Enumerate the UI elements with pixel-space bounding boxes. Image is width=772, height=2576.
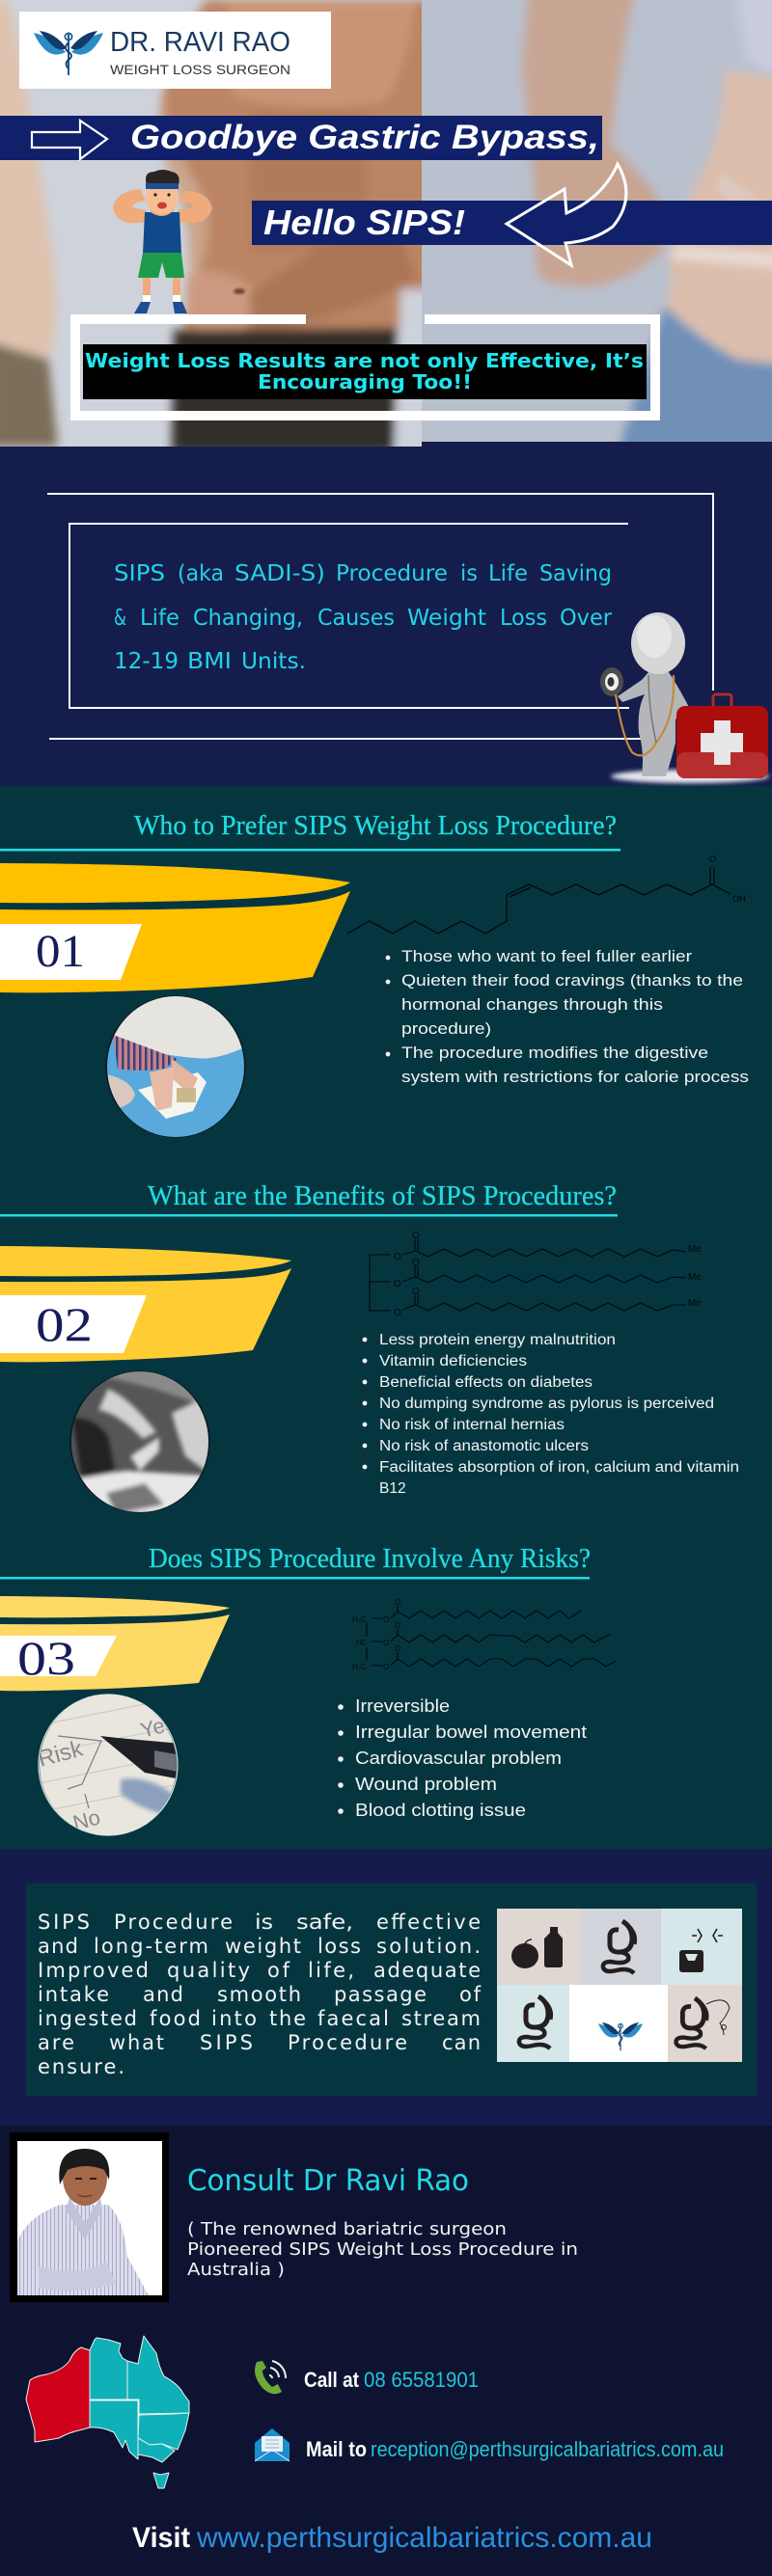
- molecule 02: O: [394, 1252, 401, 1262]
- molecule 03: HC: [356, 1639, 368, 1647]
- summary text: SIPS: [200, 2031, 253, 2054]
- icon: curved arrow: [507, 164, 626, 265]
- band 02: 02: [36, 1297, 93, 1351]
- bullet list 01: procedure): [401, 1020, 491, 1038]
- inner frame: [69, 524, 629, 708]
- intro text: Life: [140, 606, 179, 631]
- molecule 03: O: [395, 1598, 400, 1607]
- intro text: BMI: [187, 649, 232, 674]
- bullet list 02: Less protein energy malnutrition: [379, 1332, 616, 1348]
- panel: SIPS intro: [0, 442, 772, 786]
- bullet list 03: Blood clotting issue: [355, 1801, 526, 1820]
- panel: teal sections: [0, 786, 772, 1849]
- bullet list 02: No risk of internal hernias: [379, 1417, 565, 1433]
- bullet list 03: Cardiovascular problem: [355, 1749, 562, 1768]
- bullet list 02: No risk of anastomotic ulcers: [379, 1438, 589, 1454]
- bullet list 03: Irregular bowel movement: [355, 1722, 587, 1742]
- website link: www.perthsurgicalbariatrics.com.au: [196, 2522, 652, 2554]
- intro text: Procedure: [336, 561, 448, 586]
- bullet list 01: system with restrictions for calorie process: [401, 1069, 749, 1086]
- bullet list 03: [338, 1696, 587, 1820]
- heading 03: Does SIPS Procedure Involve Any Risks?: [149, 1543, 591, 1574]
- bullet list 01: Those who want to feel fuller earlier: [401, 948, 693, 965]
- molecule 01: [347, 854, 745, 934]
- panel: safe procedure summary: [0, 1849, 772, 2126]
- summary text: the: [269, 2007, 306, 2030]
- summary text: Improved: [38, 1959, 149, 1982]
- molecule 01: O: [709, 854, 716, 864]
- summary text: faecal: [317, 2007, 389, 2030]
- photo: Dr Ravi Rao portrait: [10, 2132, 169, 2302]
- summary text: of: [267, 1959, 290, 1982]
- summary text: ensure.: [38, 2055, 124, 2078]
- summary text: safe,: [296, 1911, 353, 1934]
- consult description: Pioneered SIPS Weight Loss Procedure in: [187, 2239, 578, 2260]
- section 03: risks: [0, 1543, 616, 1842]
- summary text: loss: [317, 1935, 361, 1958]
- white frame: [75, 319, 655, 416]
- bullet list 02: No dumping syndrome as pylorus is perceived: [379, 1396, 714, 1412]
- summary text: what: [109, 2031, 164, 2054]
- intro text: (aka: [178, 561, 224, 586]
- intro text: &: [114, 606, 126, 631]
- callout: results: Weight Loss Results are not only Effective, It’s: [85, 349, 644, 372]
- molecule 02: O: [394, 1308, 401, 1318]
- headline line one: Goodbye Gastric Bypass,: [130, 119, 599, 156]
- bullet list 02: Vitamin deficiencies: [379, 1353, 527, 1369]
- molecule 02: Me: [688, 1272, 702, 1283]
- summary text: adequate: [373, 1959, 481, 1982]
- banner: goodbye: [0, 116, 602, 160]
- bullet list 02: Beneficial effects on diabetes: [379, 1374, 593, 1391]
- icon: stomach one: [603, 1921, 636, 1973]
- intro text: Weight: [407, 606, 486, 631]
- consult description: [187, 2219, 578, 2280]
- intro text: SADI-S): [234, 561, 325, 586]
- intro text: Changing,: [193, 606, 303, 631]
- icon: right arrow: [32, 121, 107, 159]
- intro text: Life: [488, 561, 528, 586]
- molecule 03: O: [383, 1615, 389, 1624]
- molecule 02: O: [412, 1231, 420, 1241]
- photo: overweight torso: [422, 0, 772, 453]
- icon: phone: [255, 2361, 286, 2394]
- intro text: Loss: [500, 606, 547, 631]
- molecule 03: H₂C: [352, 1663, 367, 1671]
- summary text: effective: [376, 1911, 481, 1934]
- consult heading: Consult Dr Ravi Rao: [187, 2164, 469, 2198]
- photo: slim torso: [0, 0, 434, 453]
- icon: scale and arrows: [679, 1929, 723, 1972]
- intro text: Units.: [241, 649, 306, 674]
- summary text: quality: [167, 1959, 250, 1982]
- summary text: passage: [334, 1983, 427, 2006]
- intro text: is: [460, 561, 478, 586]
- logo tagline: WEIGHT LOSS SURGEON: [110, 62, 290, 77]
- molecule 02: O: [412, 1287, 420, 1297]
- summary text: solution.: [376, 1935, 481, 1958]
- molecule 03: H₂C: [352, 1615, 367, 1624]
- panel: consult footer: [10, 2132, 723, 2553]
- icon: mail: [255, 2428, 290, 2461]
- photo: risk note and pen: Yes: [138, 1710, 178, 1743]
- summary text: and: [38, 1935, 78, 1958]
- photo: risk note and pen: [38, 1694, 179, 1836]
- molecule 03: O: [395, 1621, 400, 1630]
- intro text: Over: [560, 606, 613, 631]
- molecule 02: Me: [688, 1244, 702, 1255]
- summary text: Procedure: [114, 1911, 233, 1934]
- band 03: 03: [17, 1631, 75, 1685]
- heading underline: [0, 849, 620, 851]
- summary text: Procedure: [288, 2031, 407, 2054]
- summary text: and: [143, 1983, 183, 2006]
- section 02: benefits: [0, 1180, 739, 1514]
- number label 01: [0, 924, 142, 980]
- intro text: Causes: [317, 606, 395, 631]
- icon: caduceus logo: [34, 31, 103, 75]
- bullet list 01: [386, 948, 749, 1086]
- band 02: [0, 1246, 291, 1362]
- heading 01: Who to Prefer SIPS Weight Loss Procedure?: [134, 810, 617, 841]
- number label 02: [0, 1295, 147, 1353]
- molecule 03: [352, 1598, 616, 1671]
- summary text: life,: [308, 1959, 354, 1982]
- consult description: ( The renowned bariatric surgeon: [187, 2219, 507, 2239]
- molecule 03: O: [383, 1639, 389, 1647]
- bullet list 01: Quieten their food cravings (thanks to the: [401, 972, 743, 990]
- icon grid: [497, 1909, 742, 2062]
- icon: flexing cartoon man: [113, 170, 212, 313]
- molecule 02: O: [412, 1258, 420, 1268]
- photo: risk note and pen: Risk: [36, 1735, 87, 1773]
- bullet list 02: B12: [379, 1480, 406, 1497]
- headline line two: Hello SIPS!: [263, 203, 465, 242]
- molecule 03: O: [395, 1644, 400, 1653]
- callout: results: Encouraging Too!!: [258, 370, 472, 393]
- molecule 02: [370, 1231, 702, 1318]
- molecule 02: O: [394, 1279, 401, 1289]
- icon: stomach two: [519, 1996, 552, 2048]
- photo: feet on scale: [105, 995, 246, 1138]
- bullet list 02: [363, 1332, 739, 1497]
- band 01: 01: [36, 926, 85, 977]
- number label 03: [0, 1636, 117, 1676]
- molecule 02: Me: [688, 1298, 702, 1309]
- summary text: of: [459, 1983, 482, 2006]
- banner: hello: [252, 164, 772, 265]
- icon: caduceus logo small: [598, 2022, 643, 2050]
- logo name: DR. RAVI RAO: [110, 27, 290, 58]
- consult description: Australia ): [187, 2260, 285, 2280]
- map of Australia: [26, 2336, 189, 2488]
- summary text: long-term: [94, 1935, 208, 1958]
- bullet list 03: Irreversible: [355, 1696, 450, 1716]
- intro text: Saving: [539, 561, 612, 586]
- contact: email: Mail to: [306, 2437, 367, 2461]
- summary text: smooth: [217, 1983, 301, 2006]
- molecule 03: O: [383, 1663, 389, 1671]
- band 01: [0, 863, 350, 992]
- summary text: SIPS: [38, 1911, 90, 1934]
- logo box: [19, 12, 331, 89]
- contact: phone: 08 65581901: [364, 2368, 479, 2392]
- bullet list 03: Wound problem: [355, 1775, 497, 1794]
- summary text: can: [442, 2031, 481, 2054]
- summary text: are: [38, 2031, 74, 2054]
- icon: apple and bottle: [511, 1927, 563, 1968]
- icon: 3D doctor with medical case: [600, 612, 769, 783]
- summary text: is: [255, 1911, 273, 1934]
- heading underline: [0, 1214, 618, 1217]
- intro text: SIPS: [114, 561, 165, 586]
- section 01: who to prefer: [0, 810, 749, 1143]
- callout: results: [83, 344, 647, 399]
- summary text: intake: [38, 1983, 109, 2006]
- website link: Visit: [132, 2522, 190, 2554]
- summary text: food: [150, 2007, 201, 2030]
- summary text: into: [211, 2007, 257, 2030]
- photo: risk note and pen: No: [70, 1804, 102, 1835]
- icon: stomach three with band: [676, 1998, 730, 2048]
- heading 02: What are the Benefits of SIPS Procedures?: [148, 1180, 617, 1211]
- contact: email: reception@perthsurgicalbariatrics.com.au: [371, 2437, 724, 2461]
- molecule 01: OH: [732, 894, 745, 904]
- hero panel: [0, 0, 772, 453]
- bullet list 01: The procedure modifies the digestive: [401, 1044, 708, 1062]
- summary text: stream: [401, 2007, 481, 2030]
- bullet list 02: Facilitates absorption of iron, calcium and vitamin: [379, 1459, 739, 1476]
- heading underline: [0, 1577, 590, 1580]
- intro text: 12-19: [114, 649, 179, 674]
- outer frame: [47, 494, 713, 739]
- band 03: [0, 1596, 230, 1691]
- summary text: ingested: [38, 2007, 137, 2030]
- bullet list 01: hormonal changes through this: [401, 996, 663, 1014]
- photo: surgeons hands: [68, 1369, 212, 1514]
- summary text: weight: [225, 1935, 301, 1958]
- contact: phone: Call at: [304, 2368, 360, 2392]
